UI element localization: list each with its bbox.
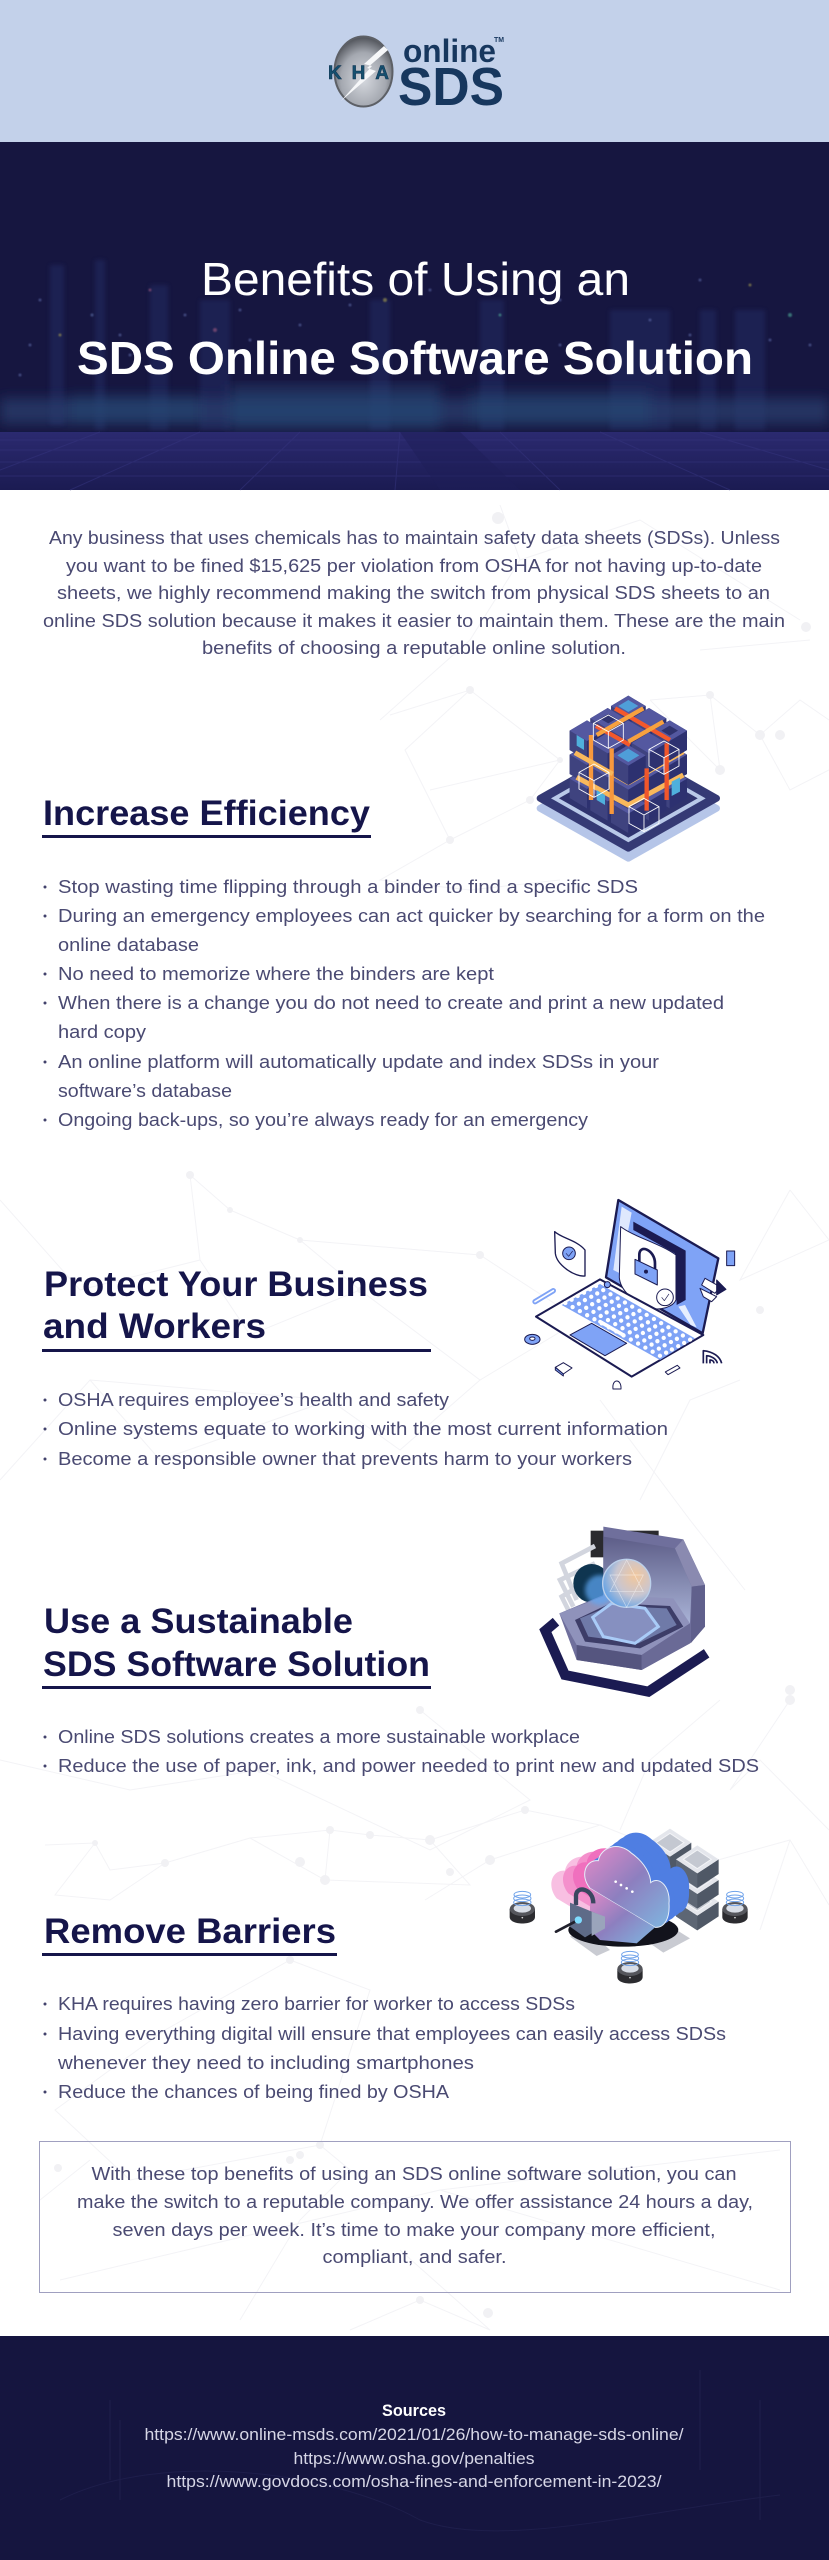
intro paragraph: you want to be fined $15,625 per violation from OSHA for not having up-to-date xyxy=(66,556,762,576)
laptop keyboard base xyxy=(536,1279,703,1377)
bullet list: sustainable: Online SDS solutions creates a more sustainable workplace xyxy=(58,1727,580,1747)
bullet list: barriers: whenever they need to including smartphones xyxy=(57,2053,474,2073)
bullet list: barriers xyxy=(44,1994,726,2102)
background network pattern xyxy=(0,505,829,2330)
icon: KHA globe logo xyxy=(328,36,392,106)
source links: https://www.online-msds.com/2021/01/26/how-to-manage-sds-online/ xyxy=(144,2425,684,2444)
heading: remove barriers: Remove Barriers xyxy=(44,1912,336,1951)
heading: protect your business and workers: Protect Your Business xyxy=(44,1265,428,1304)
bullet list: protect: OSHA requires employee’s health and safety xyxy=(58,1390,449,1410)
intro paragraph: online SDS solution because it makes it easier to maintain them. These are the main xyxy=(43,611,785,631)
icon: isometric laptop with lock xyxy=(525,1200,735,1389)
cityscape background xyxy=(0,260,829,490)
section: increase efficiency xyxy=(42,696,765,1130)
logo wordmark: TM xyxy=(494,37,504,44)
heading: use a sustainable sds software solution xyxy=(42,1602,431,1689)
icon: cloud security with servers xyxy=(510,1829,748,1983)
bullet list: barriers: Reduce the chances of being fined by OSHA xyxy=(58,2082,449,2102)
logo wordmark: SDS xyxy=(398,57,504,117)
small shield xyxy=(555,1232,585,1276)
bullet list: efficiency: No need to memorize where the binders are kept xyxy=(58,964,494,984)
bullet list: sustainable: Reduce the use of paper, ink, and power needed to print new and updated SDS xyxy=(58,1756,759,1776)
bullet list: barriers: Having everything digital will ensure that employees can easily access SDSs xyxy=(58,2024,726,2044)
logo wordmark xyxy=(398,33,504,117)
laptop screen xyxy=(606,1200,718,1333)
intro paragraph: benefits of choosing a reputable online solution. xyxy=(202,638,626,658)
small floating parts xyxy=(525,1251,735,1376)
bullet list: efficiency: software’s database xyxy=(58,1081,232,1101)
section: remove barriers xyxy=(42,1829,748,2102)
bullet list: efficiency: online database xyxy=(58,935,199,955)
source links: https://www.govdocs.com/osha-fines-and-enforcement-in-2023/ xyxy=(166,2472,662,2491)
callout: conclusion box: make the switch to a reputable company. We offer assistance 24 hours a day, xyxy=(77,2192,753,2212)
heading: use a sustainable sds software solution: SDS Software Solution xyxy=(43,1645,430,1684)
bullet list: efficiency: During an emergency employees can act quicker by searching for a form on the xyxy=(58,906,765,926)
section: protect your business xyxy=(42,1200,735,1469)
bullet list: efficiency: hard copy xyxy=(58,1022,146,1042)
callout: conclusion box xyxy=(40,2142,790,2292)
section: sustainable solution xyxy=(42,1527,759,1776)
bullet list: protect: Online systems equate to working with the most current information xyxy=(58,1419,668,1439)
bullet list: efficiency: Stop wasting time flipping through a binder to find a specific SDS xyxy=(58,877,638,897)
bullet list: protect: Become a responsible owner that prevents harm to your workers xyxy=(58,1449,632,1469)
callout: conclusion box: compliant, and safer. xyxy=(322,2247,506,2267)
heading: increase efficiency: Increase Efficiency xyxy=(43,794,371,833)
bullet list: protect xyxy=(44,1390,668,1469)
bullet list: efficiency: Ongoing back-ups, so you’re always ready for an emergency xyxy=(58,1110,588,1130)
intro paragraph: Any business that uses chemicals has to maintain safety data sheets (SDSs). Unless xyxy=(49,528,780,548)
intro paragraph xyxy=(43,528,785,658)
bullet list: barriers: KHA requires having zero barrier for worker to access SDSs xyxy=(58,1994,575,2014)
heading: use a sustainable sds software solution: Use a Sustainable xyxy=(44,1602,353,1641)
callout: conclusion box: seven days per week. It’s time to make your company more efficient, xyxy=(112,2220,716,2240)
icon: KHA globe logo: KHA xyxy=(328,63,389,84)
footer: sources xyxy=(0,2336,829,2560)
title xyxy=(77,253,753,384)
heading: protect your business and workers: and Workers xyxy=(43,1307,266,1346)
sources heading: Sources xyxy=(382,2401,446,2420)
title: SDS Online Software Solution xyxy=(77,332,753,384)
bullet list: efficiency xyxy=(44,877,765,1130)
padlock xyxy=(556,1890,605,1937)
callout: conclusion box: With these top benefits of using an SDS online software solution, you can xyxy=(92,2164,736,2184)
logo wordmark: online xyxy=(403,33,496,69)
icon: isometric data cube xyxy=(540,696,717,858)
bullet list: efficiency: An online platform will automatically update and index SDSs in your xyxy=(58,1052,659,1072)
title: Benefits of Using an xyxy=(201,253,630,305)
hero banner xyxy=(0,142,829,490)
heading: protect your business and workers xyxy=(42,1265,431,1352)
source links xyxy=(144,2425,684,2491)
source links: https://www.osha.gov/penalties xyxy=(294,2449,534,2468)
bullet list: sustainable xyxy=(44,1727,759,1776)
bullet list: efficiency: When there is a change you do not need to create and print a new updated xyxy=(58,993,724,1013)
logo header band xyxy=(0,0,829,142)
icon: hexagonal crystal chamber xyxy=(545,1527,707,1692)
intro paragraph: sheets, we highly recommend making the switch from physical SDS sheets to an xyxy=(57,583,770,603)
